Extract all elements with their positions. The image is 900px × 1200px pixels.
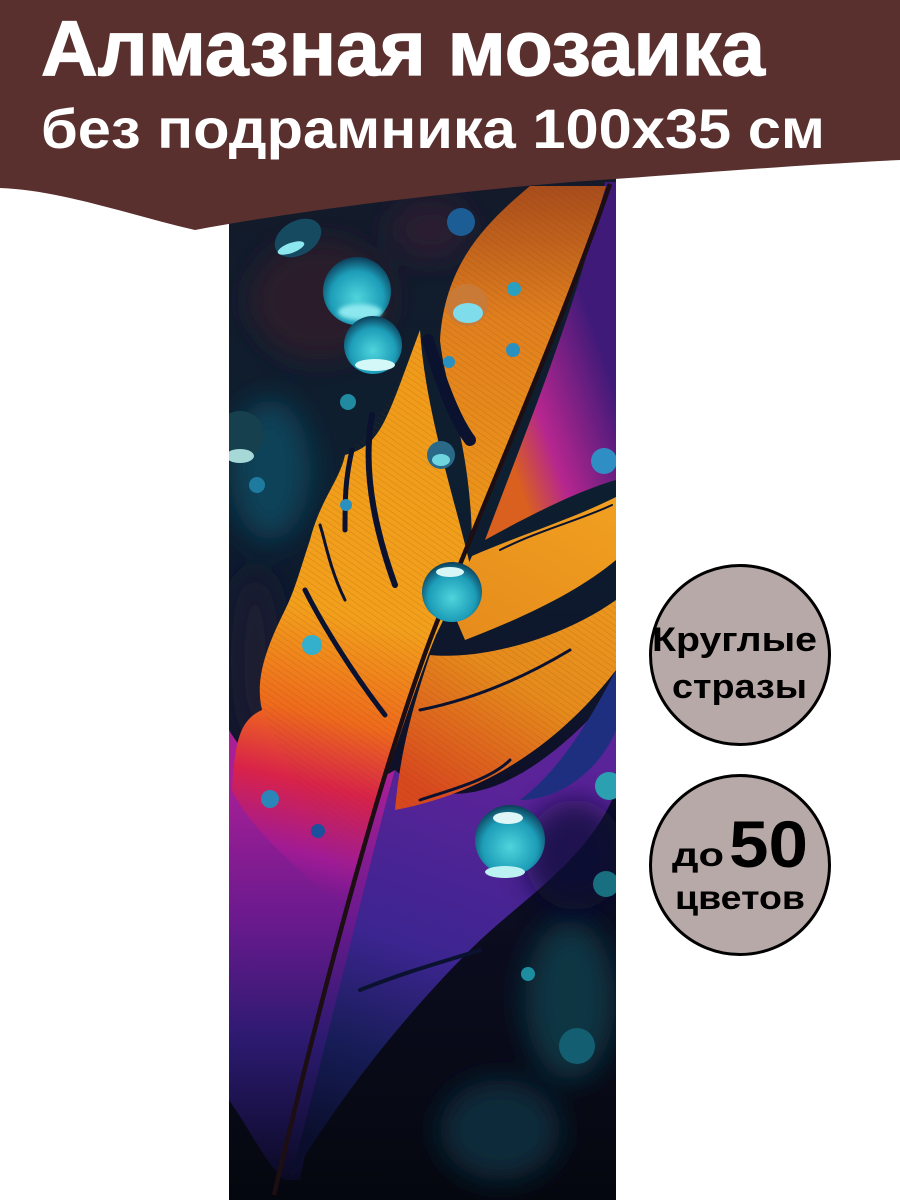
subtitle: без подрамника 100х35 см (41, 97, 825, 160)
title: Алмазная мозаика (41, 4, 766, 92)
feather right lower orange vane (395, 600, 616, 810)
feather lower-left vane (229, 730, 395, 1180)
feather spine (274, 184, 610, 1195)
feather main left vane (232, 330, 470, 910)
feather mid-right orange vane (450, 497, 616, 640)
badge: up to 50 colours: цветов (675, 879, 805, 916)
feather lower-right vane (298, 720, 616, 1156)
water drops (216, 208, 623, 1064)
badge: round rhinestones (650, 566, 830, 744)
badge: up to 50 colours: 50 (729, 807, 808, 881)
poster image: feather with water drops (216, 170, 625, 1200)
barb texture (260, 186, 616, 880)
badge: up to 50 colours (650, 776, 830, 954)
feather upper-right purple vane (485, 182, 616, 540)
badge: round rhinestones: стразы (672, 668, 807, 706)
banner (0, 0, 900, 230)
feather upper orange vane (440, 186, 606, 540)
shadow on lower-right vane edge (525, 800, 625, 910)
dark gaps between barbs (305, 340, 612, 990)
blue outer strands (520, 670, 616, 800)
badge: up to 50 colours: до (672, 836, 724, 873)
badge: round rhinestones: Круглые (652, 621, 817, 659)
